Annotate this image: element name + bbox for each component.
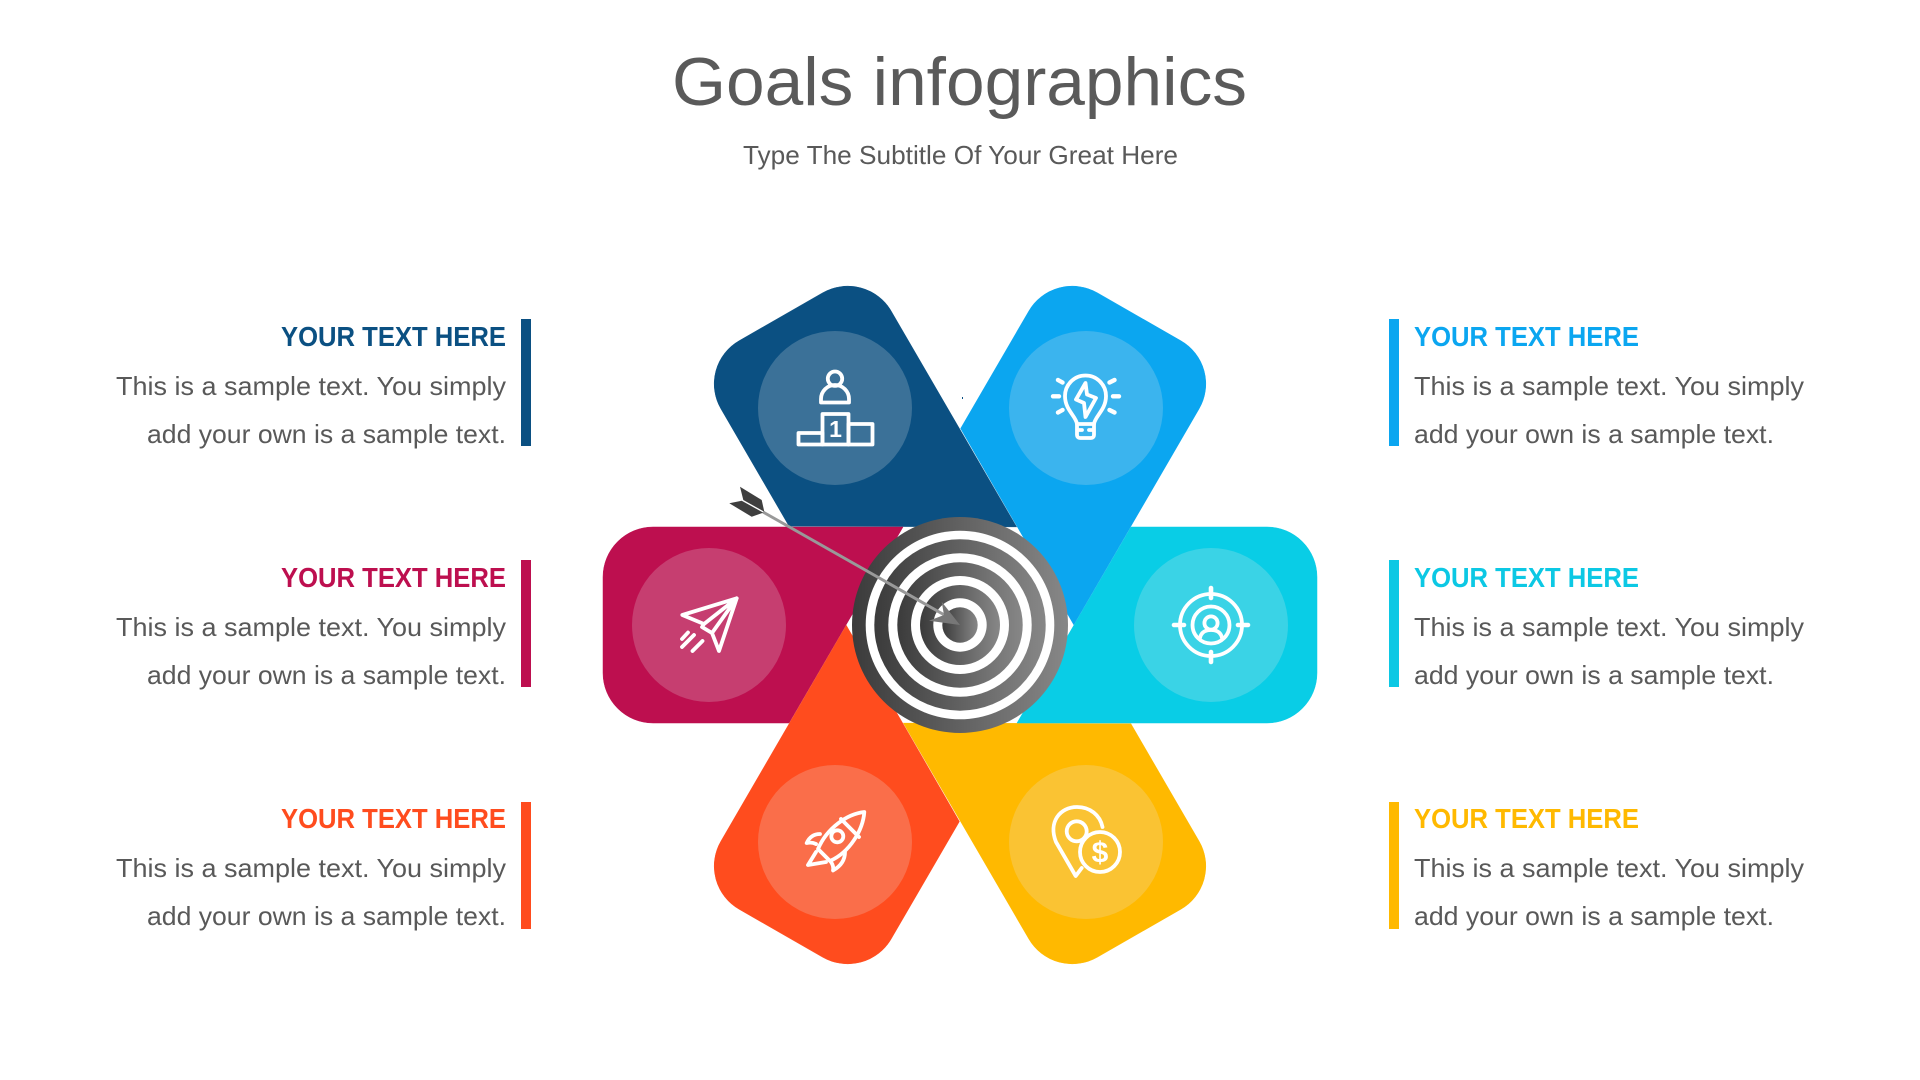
text block: top left: YOUR TEXT HERE [281, 321, 506, 352]
panel: yellow petal [903, 625, 1224, 982]
text block: top right: This is a sample text. You simply [1414, 371, 1804, 401]
text block: middle left: This is a sample text. You simply [116, 612, 506, 642]
text block: middle left: add your own is a sample text. [147, 660, 506, 690]
text block: middle right: YOUR TEXT HERE [1414, 562, 1639, 593]
panel: cyan petal [1017, 527, 1317, 723]
text block: bottom left: add your own is a sample text. [147, 901, 506, 931]
text block: bottom right: YOUR TEXT HERE [1414, 803, 1639, 834]
text block: middle left: YOUR TEXT HERE [281, 562, 506, 593]
panel: light blue petal [903, 268, 1224, 625]
icon: podium: 1 [829, 416, 842, 442]
text block: top right [1389, 319, 1804, 449]
text block: bottom right [1389, 802, 1804, 931]
arrow [729, 487, 960, 625]
text block: bottom right: This is a sample text. You simply [1414, 853, 1804, 883]
text block: top left: This is a sample text. You simply [116, 371, 506, 401]
icon: light bulb [1053, 376, 1119, 438]
title: Goals infographics [672, 44, 1247, 120]
dot: stray mark [962, 397, 963, 399]
icon: target person [1174, 588, 1248, 662]
subtitle: Type The Subtitle Of Your Great Here [743, 140, 1178, 170]
panel: crimson petal [603, 527, 903, 723]
icon: podium [798, 372, 872, 444]
text block: middle right: add your own is a sample text. [1414, 660, 1774, 690]
text block: middle left [116, 560, 531, 690]
panel: orange petal [696, 625, 1017, 982]
text block: bottom right: add your own is a sample text. [1414, 901, 1774, 931]
text block: middle right [1389, 560, 1804, 690]
text block: top right: YOUR TEXT HERE [1414, 321, 1639, 352]
target [852, 517, 1068, 733]
icon: rocket [807, 812, 864, 870]
icon: paper plane [682, 598, 737, 651]
text block: bottom left [116, 802, 531, 931]
text block: top left: add your own is a sample text. [147, 419, 506, 449]
text block: bottom left: YOUR TEXT HERE [281, 803, 506, 834]
icon: pin with dollar coin: $ [1092, 836, 1109, 870]
panel: navy petal [696, 268, 1017, 625]
text block: top right: add your own is a sample text. [1414, 419, 1774, 449]
text block: middle right: This is a sample text. You simply [1414, 612, 1804, 642]
text block: bottom left: This is a sample text. You simply [116, 853, 506, 883]
text block: top left [116, 319, 531, 449]
icon: pin with dollar coin [1053, 807, 1120, 876]
